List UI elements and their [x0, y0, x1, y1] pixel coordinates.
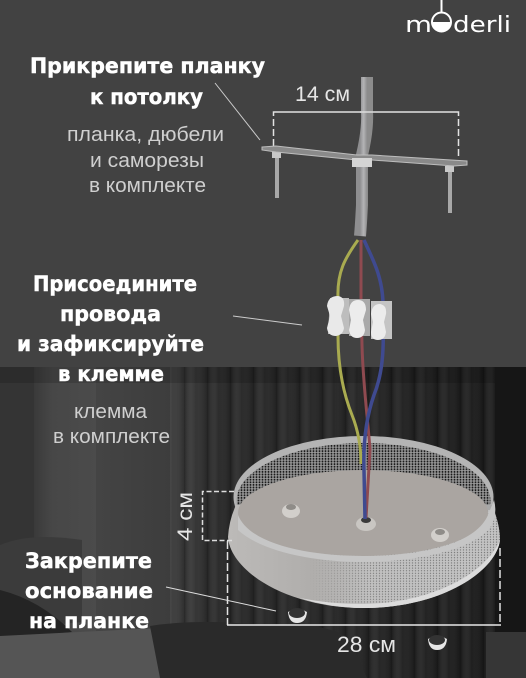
dimension: 14 cm: 14 см — [295, 83, 350, 106]
heading: step 3: Закрепите — [25, 549, 152, 573]
dimension: 4 cm: 4 см — [174, 492, 197, 541]
heading: step 2 — [17, 272, 204, 386]
cable — [360, 77, 367, 236]
wire: red — [361, 240, 370, 518]
text: step 2 note: клемма — [74, 401, 148, 423]
heading: step 3 — [25, 549, 153, 633]
background: top wall — [0, 0, 526, 367]
heading: step 1 — [30, 54, 265, 109]
nuts — [282, 504, 449, 542]
text: step 1 note: и саморезы — [90, 150, 204, 172]
icon: wall plug left — [288, 608, 307, 623]
terminal blocks — [327, 296, 392, 340]
text: step 2 note — [53, 401, 170, 448]
text: step 1 note: в комплекте — [89, 175, 206, 197]
heading: step 2: Присоедините — [33, 272, 197, 296]
plate — [238, 470, 488, 556]
leader line: step 2 — [233, 316, 302, 325]
heading: step 2: и зафиксируйте — [17, 332, 204, 356]
wire: yellow — [338, 240, 361, 464]
rim and back wall inner mesh — [234, 436, 494, 558]
mesh — [322, 510, 500, 608]
dimension: 4 cm — [174, 492, 234, 541]
logo: moderli: m — [405, 13, 432, 38]
heading: step 3: основание — [25, 579, 153, 603]
wire: blue — [364, 240, 383, 519]
text: step 2 note: в комплекте — [53, 426, 170, 448]
dimension: 28 cm: 28 см — [337, 632, 396, 657]
heading: step 2: провода — [60, 302, 161, 326]
lamp base — [228, 436, 505, 620]
icon: wall plug right — [428, 635, 447, 650]
logo: moderli: derli — [453, 13, 511, 38]
heading: step 2: в клемме — [58, 362, 164, 386]
heading: step 1: к потолку — [90, 85, 203, 109]
text: step 1 note: планка, дюбели — [67, 124, 224, 146]
background: bedroom photo — [0, 367, 526, 678]
text: step 1 note — [67, 124, 224, 197]
mounting bar with screws — [262, 146, 467, 213]
bed — [0, 537, 367, 678]
logo: moderli — [405, 0, 511, 38]
dimension: 14 cm — [271, 83, 461, 156]
outer front band — [228, 505, 500, 608]
wire: dimension line over cable — [360, 111, 373, 113]
leader line: step 1 — [215, 83, 260, 140]
leader line: step 3 — [166, 587, 276, 611]
heading: step 1: Прикрепите планку — [30, 54, 265, 78]
heading: step 3: на планке — [29, 609, 149, 633]
